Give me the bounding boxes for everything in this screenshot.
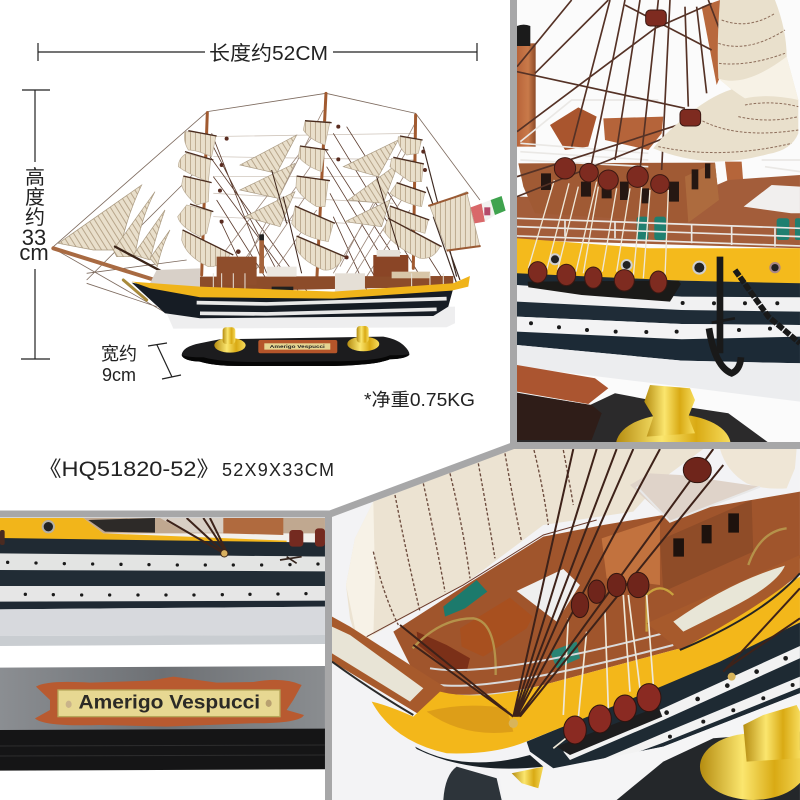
left lifeboat	[332, 617, 447, 715]
model code and size: 《HQ51820-52》	[38, 458, 220, 481]
dimension: length: 长度约52CM	[209, 42, 328, 65]
ship model photo	[53, 93, 506, 366]
dimension: width: 9cm	[102, 365, 136, 385]
portholes	[550, 254, 780, 274]
dimension: height: 33	[22, 225, 46, 250]
gold stand	[512, 705, 800, 800]
dimension: height: 高	[25, 166, 45, 189]
funnel	[259, 234, 264, 273]
panel: lower left hull and nameplate close-ups	[0, 518, 325, 771]
spanker sail	[428, 192, 481, 251]
deck	[393, 492, 800, 702]
white railings	[430, 633, 677, 696]
dark and white hull stripes	[517, 273, 800, 402]
dimension: width: 宽约	[101, 344, 137, 364]
white ropes	[528, 180, 668, 278]
brass rails	[413, 528, 787, 675]
dimension: height: 约	[25, 206, 45, 229]
ropes, belaying pin and blocks	[0, 518, 325, 563]
white rope falls	[553, 595, 653, 748]
staysails	[240, 135, 398, 227]
nameplate close-up: Amerigo Vespucci	[78, 692, 260, 713]
white lower hull	[498, 693, 800, 800]
wooden block on base	[517, 365, 608, 404]
portholes and dots	[6, 521, 320, 597]
photo backdrop	[330, 445, 800, 800]
model code and size: 52X9X33CM	[222, 460, 334, 480]
deck cabin	[518, 163, 719, 223]
panel: upper right deck close-up	[515, 0, 800, 476]
base below bow	[443, 732, 800, 800]
name plaque on base	[258, 340, 337, 353]
gold stand	[616, 385, 730, 442]
dimension: height	[19, 90, 50, 359]
mast close-up	[702, 0, 743, 180]
yellow bow hull	[372, 577, 800, 753]
brown rigging lines	[517, 0, 735, 197]
anchor and chain	[709, 257, 800, 373]
dimension: length	[38, 42, 477, 65]
nameplate close-up	[35, 677, 304, 727]
rear cabin	[602, 473, 760, 592]
yellow hull band	[517, 238, 800, 284]
right lifeboat	[647, 555, 800, 650]
curled top sail	[720, 449, 797, 489]
hull	[132, 276, 470, 329]
stem decoration	[415, 747, 543, 769]
masts	[202, 93, 416, 283]
name plaque on base: Amerigo Vespucci	[270, 344, 325, 349]
deck	[517, 175, 800, 248]
base stand	[182, 326, 409, 366]
lower deadeyes	[509, 673, 736, 755]
model code and size	[38, 458, 334, 481]
deck and cabins	[150, 250, 453, 297]
dark rigging fan	[400, 449, 800, 717]
lower deadeyes	[528, 262, 667, 293]
porthole dots	[529, 301, 779, 334]
dimension: width	[101, 343, 181, 385]
square sails	[178, 122, 440, 270]
channel board	[528, 281, 681, 302]
upper deadeyes	[571, 457, 711, 618]
photo backdrop	[515, 0, 800, 445]
yards and blocks	[183, 121, 442, 273]
panel: lower right bow close-up	[330, 445, 800, 800]
bowsprit	[53, 247, 197, 300]
flag	[471, 196, 506, 223]
white railings	[517, 100, 800, 247]
big sail	[346, 449, 703, 652]
deadeye blocks on sail and rigging	[554, 10, 701, 193]
white bench and chest	[417, 569, 580, 672]
rigging lines	[53, 93, 480, 313]
jib sails	[58, 185, 170, 267]
funnel close-up	[517, 25, 536, 147]
white bench	[744, 185, 800, 213]
porthole dots	[664, 656, 795, 739]
black base surface	[517, 393, 772, 445]
panel: full ship with dimensions	[19, 42, 506, 481]
base close-up	[0, 666, 325, 771]
dark hull stripes	[527, 622, 800, 770]
dimension: height: cm	[19, 240, 49, 265]
curled sail	[653, 0, 798, 162]
hull close-up	[0, 518, 325, 646]
net weight note: *净重0.75KG	[364, 390, 475, 410]
dimension: height: 度	[25, 186, 45, 209]
green fittings	[637, 217, 800, 240]
